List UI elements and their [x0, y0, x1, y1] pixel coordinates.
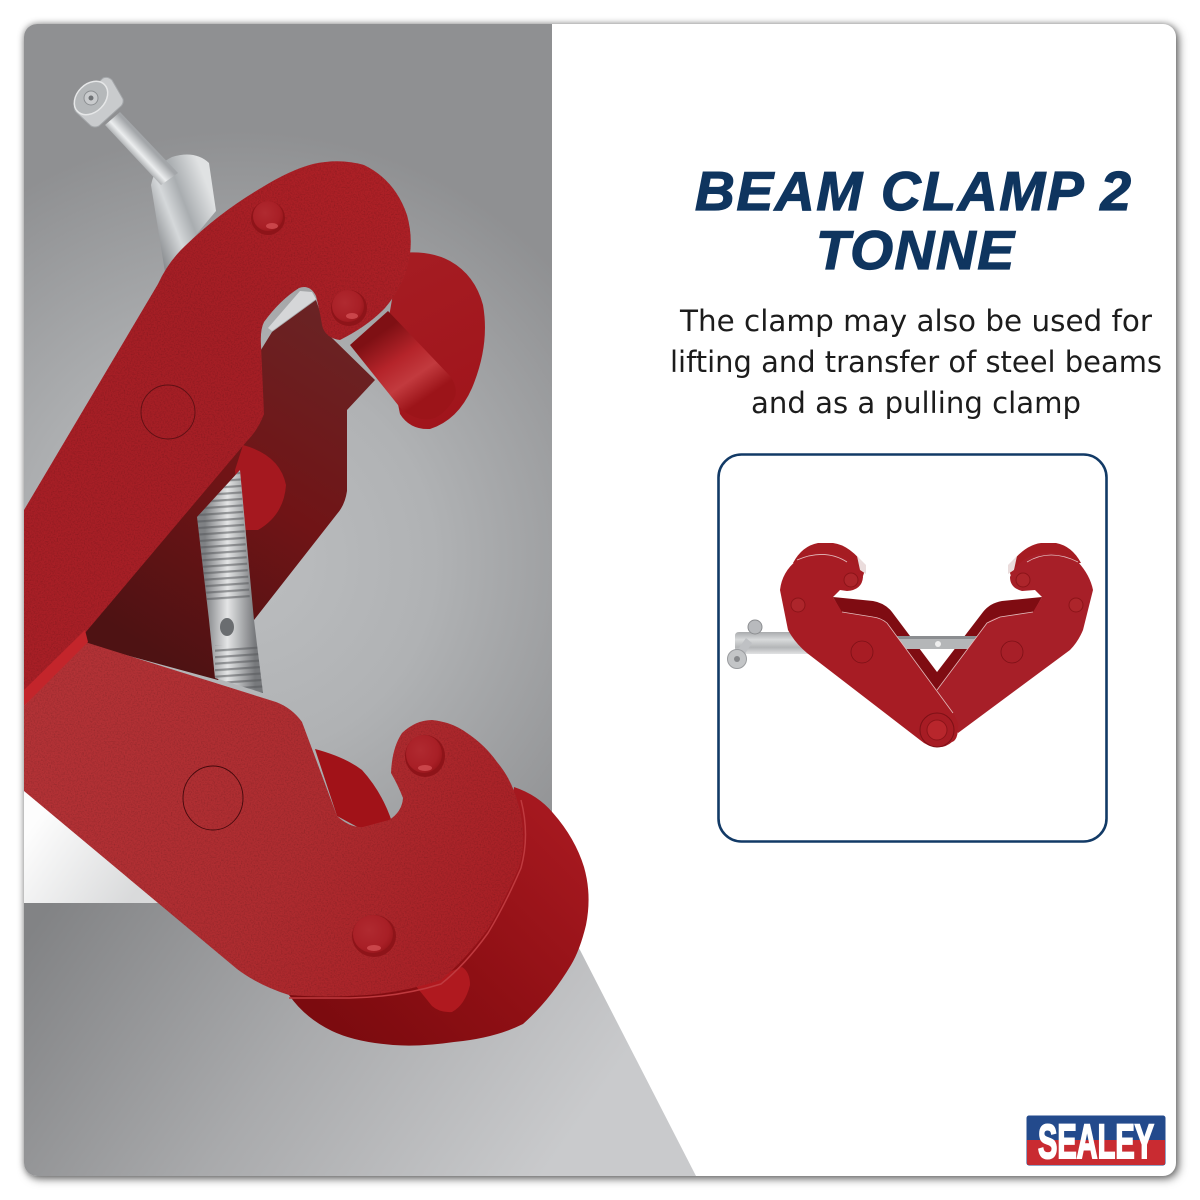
tommy bar [105, 112, 178, 185]
top jaw: rear lobe [385, 252, 485, 429]
top jaw: slot gap [268, 291, 316, 331]
description text [670, 304, 1162, 420]
lower jaw: front plate [24, 642, 526, 998]
sleeve [151, 155, 216, 272]
photo backdrop: white wedge [24, 790, 160, 903]
inset rivets and bosses [791, 573, 1083, 747]
lower jaw: rivet two [352, 915, 396, 957]
threaded rod [197, 470, 263, 693]
inset frame [718, 454, 1106, 842]
lower jaw: rivet one [405, 735, 445, 777]
inset product image: beam clamp [728, 543, 1093, 747]
top jaw: spacer pin [350, 311, 448, 408]
rear plates [793, 543, 1081, 695]
photo backdrop: floor [24, 903, 696, 1176]
top jaw: rivet two [331, 290, 367, 326]
title: TONNE [816, 219, 1016, 281]
top jaw: rivet one [251, 201, 285, 235]
lower jaw: inner lobe at notch [315, 749, 392, 830]
plate seam highlight [797, 554, 1078, 713]
description text: lifting and transfer of steel beams [670, 345, 1162, 379]
bar head [74, 77, 124, 128]
description text: The clamp may also be used for [679, 304, 1152, 338]
panel: product photo [24, 24, 696, 1176]
screw: handle and sleeve [68, 75, 216, 272]
top jaw: rear plate [70, 300, 375, 680]
title: BEAM CLAMP 2 [695, 160, 1131, 222]
top jaw: round boss outline [141, 385, 195, 439]
screw assembly [728, 620, 985, 668]
plate edge highlight [289, 800, 526, 998]
logo background [1026, 1116, 1166, 1166]
right plate [937, 553, 1093, 733]
top jaw: lower spacer knob [235, 445, 286, 530]
description text: and as a pulling clamp [751, 386, 1081, 420]
top jaw: front plate [24, 161, 411, 705]
title [695, 160, 1131, 281]
lower jaw: rear lobe [289, 787, 589, 1046]
left plate [780, 552, 958, 747]
lower jaw: round boss outline [183, 766, 243, 830]
logo: Sealey [1026, 1116, 1166, 1169]
lower jaw: spacer pin [415, 967, 470, 1012]
photo backdrop: wall [24, 24, 552, 904]
lower jaw: top plate edge [24, 630, 88, 706]
